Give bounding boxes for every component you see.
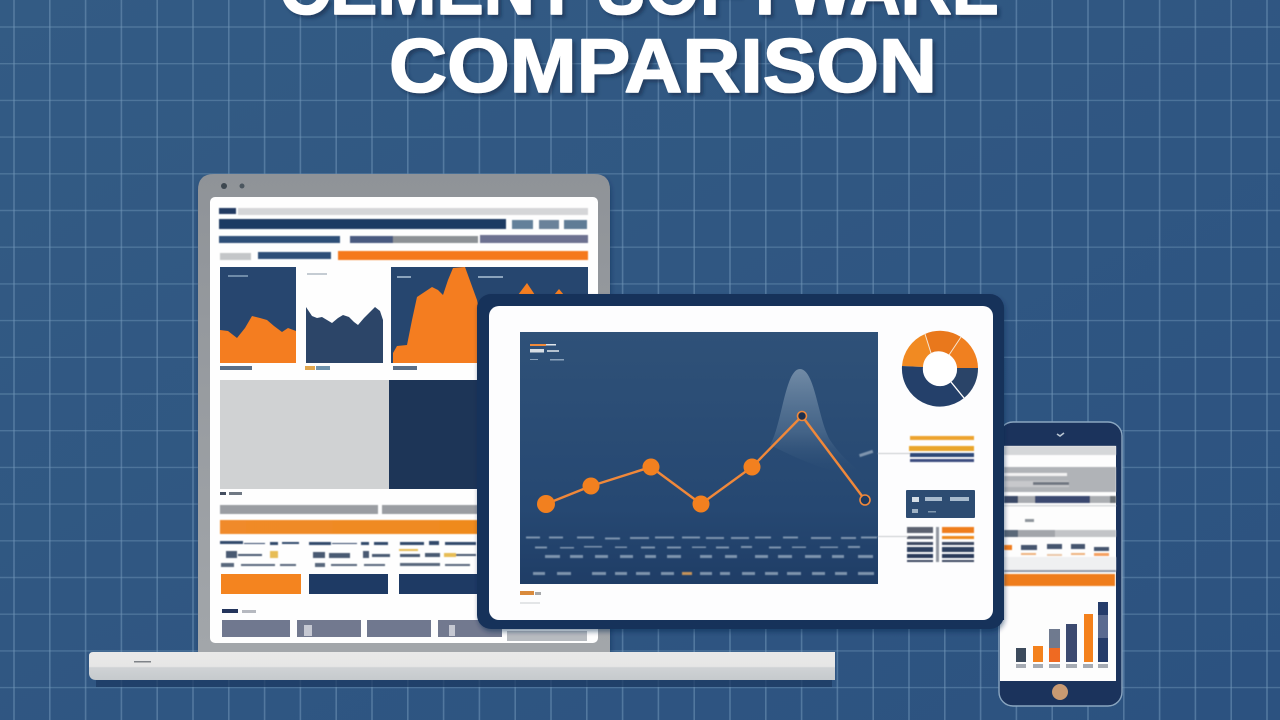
area chart 1: [220, 267, 296, 370]
laptop: [89, 174, 835, 687]
tablet: [477, 294, 1004, 629]
title: COMPARISON: [389, 24, 937, 109]
metric tiles: [221, 574, 481, 594]
chart caption: [520, 591, 541, 604]
line chart panel: [520, 332, 878, 584]
axis labels: [526, 450, 877, 575]
legend bars: [878, 436, 974, 462]
data points: [537, 412, 870, 513]
laptop base: [89, 652, 835, 687]
table section: [220, 505, 478, 567]
laptop lid bezel: [198, 174, 610, 654]
comparison table: [878, 527, 974, 562]
donut chart: [902, 331, 978, 407]
line series: [546, 416, 865, 504]
bottom cards: [222, 609, 587, 641]
legend: [530, 344, 564, 360]
phone home button: [1052, 684, 1068, 700]
dashboard header bars: [219, 208, 588, 260]
tablet body: [477, 294, 1004, 629]
summary box: [906, 490, 975, 518]
phone speaker icon: [1057, 433, 1064, 436]
phone bar chart: [1016, 602, 1108, 666]
smartphone: [999, 422, 1122, 706]
phone body: [999, 422, 1122, 706]
lower panels: [220, 380, 481, 495]
laptop screen: [210, 197, 598, 643]
peak glow: [770, 369, 862, 475]
area chart 2: [305, 273, 383, 370]
area chart 3: [391, 267, 588, 370]
tablet screen: [489, 306, 993, 620]
phone screen: [1000, 446, 1116, 681]
title: [279, 0, 999, 109]
